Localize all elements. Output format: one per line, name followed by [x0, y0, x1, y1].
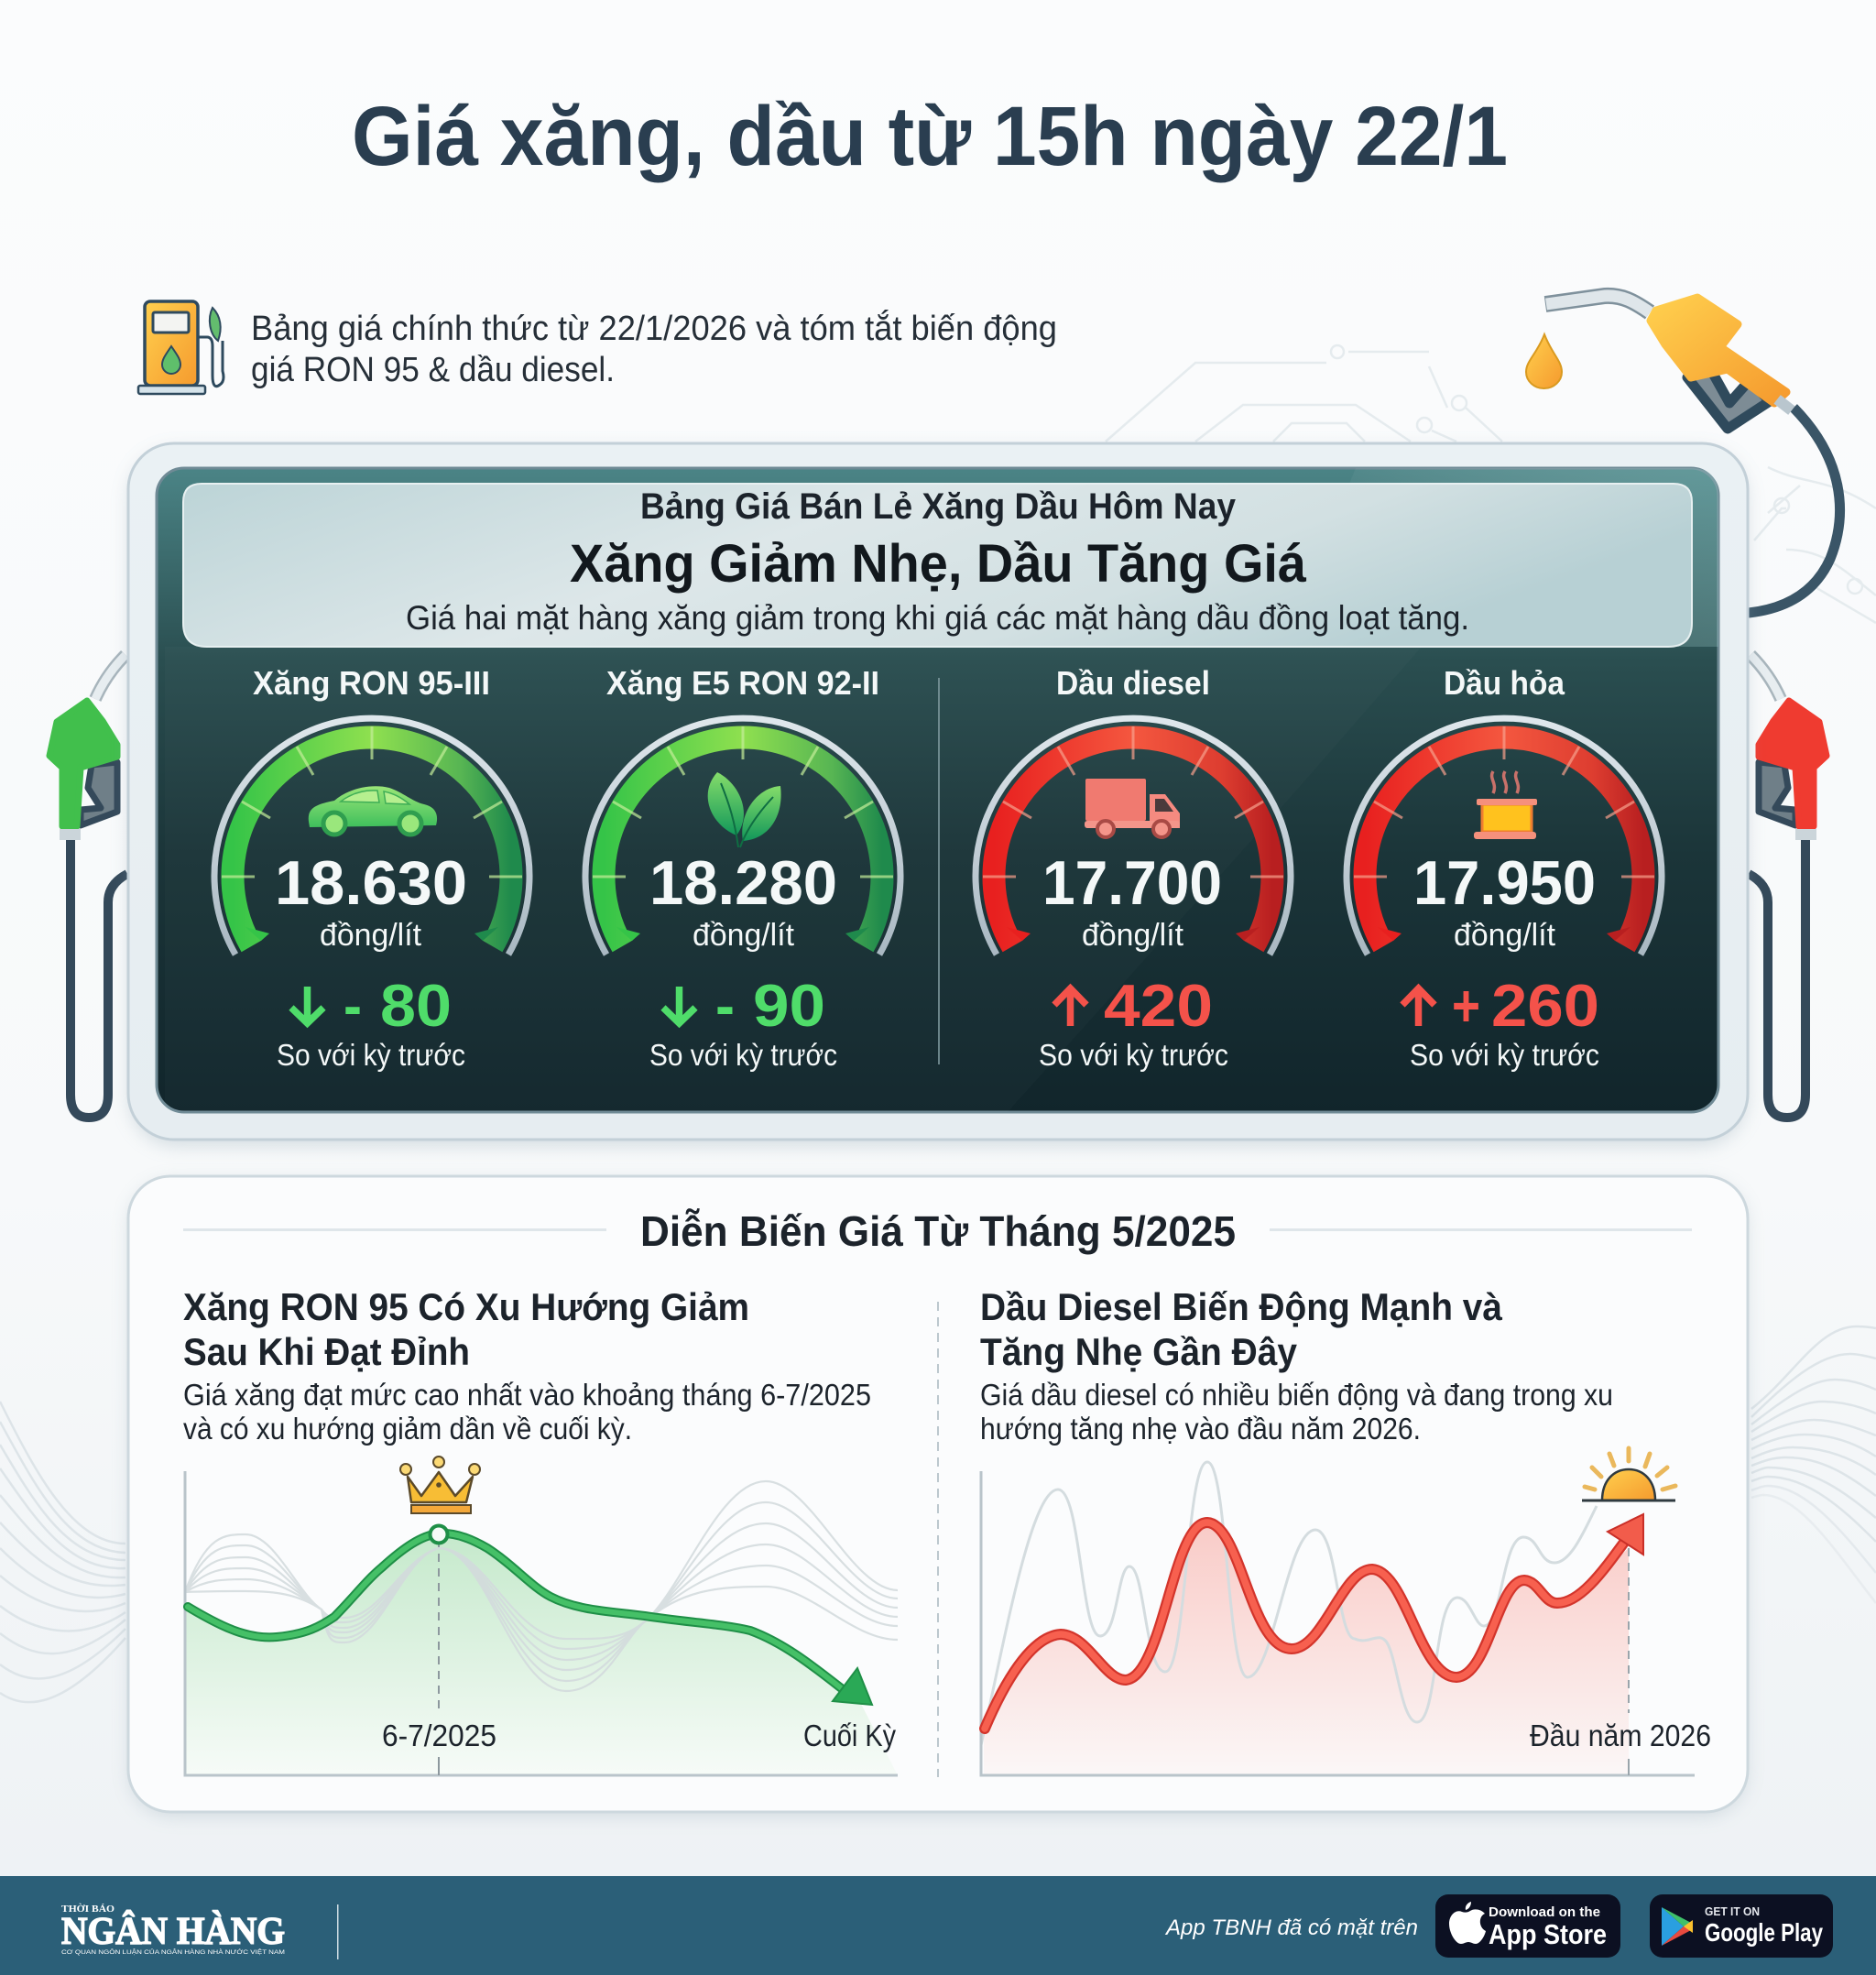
gauge: Dầu diesel: 420 [1104, 972, 1213, 1039]
text: diesel trend [980, 1285, 1613, 1446]
title: Giá xăng, dầu từ 15h ngày 22/1 [352, 90, 1508, 183]
gauge: Dầu hỏa: Dầu hỏa [1444, 664, 1565, 702]
icon: sunrise [1582, 1448, 1675, 1500]
text: diesel trend: Giá dầu diesel có nhiều biến động và đang trong xu [980, 1378, 1613, 1412]
background waves right [1751, 1326, 1876, 1603]
gauge: Dầu hỏa: 17.950 [1413, 848, 1596, 918]
button: Google Play: Google Play [1705, 1918, 1823, 1947]
icon: kerosene stove [1474, 771, 1537, 839]
gauge: Xăng RON 95-III [214, 664, 529, 1072]
gauge: Dầu hỏa: 260 [1491, 972, 1599, 1039]
icon: truck [1085, 779, 1180, 837]
icon: leaves [708, 772, 781, 847]
text: RON 95 trend: Giá xăng đạt mức cao nhất vào khoảng tháng 6-7/2025 [183, 1378, 871, 1412]
icon: green nozzle with hose [49, 655, 127, 1118]
icon: oil drop [1526, 334, 1562, 388]
intro text [251, 309, 1057, 389]
board header: Xăng Giảm Nhẹ, Dầu Tăng Giá [570, 534, 1307, 594]
text: diesel trend: hướng tăng nhẹ vào đầu năm 2026. [980, 1412, 1421, 1446]
gauge: Dầu hỏa: + [1452, 972, 1480, 1039]
icon: yellow nozzle with hose [1545, 296, 1840, 613]
gauge: Dầu hỏa: đồng/lít [1454, 918, 1556, 953]
background waves left [0, 1402, 125, 1702]
gauge: Xăng E5 RON 92-II: 18.280 [649, 848, 837, 918]
gauge: Xăng E5 RON 92-II: So với kỳ trước [649, 1038, 837, 1072]
intro text: giá RON 95 & dầu diesel. [251, 351, 615, 389]
gauge: Xăng E5 RON 92-II: 90 [753, 972, 825, 1039]
gauge: Xăng E5 RON 92-II: Xăng E5 RON 92-II [606, 664, 879, 702]
text: RON 95 trend [183, 1285, 871, 1446]
chart: RON 95 line chart: Cuối Kỳ [803, 1719, 896, 1752]
button: App Store: App Store [1489, 1918, 1607, 1950]
gauge: Xăng RON 95-III: đồng/lít [320, 918, 422, 953]
button: App Store: Download on the [1489, 1904, 1600, 1920]
board header [183, 484, 1692, 647]
button: Google Play: GET IT ON [1705, 1904, 1760, 1918]
board header: Bảng Giá Bán Lẻ Xăng Dầu Hôm Nay [640, 486, 1237, 527]
chart: diesel line chart: Đầu năm 2026 [1530, 1719, 1711, 1752]
panel: price board [128, 443, 1748, 1145]
footer bar [0, 1876, 1876, 1975]
text: diesel trend: Dầu Diesel Biến Động Mạnh và [980, 1285, 1503, 1328]
gauge: Dầu diesel [976, 664, 1291, 1072]
text: RON 95 trend: và có xu hướng giảm dần về cuối kỳ. [183, 1412, 632, 1446]
text: RON 95 trend: Sau Khi Đạt Đỉnh [183, 1330, 470, 1373]
icon: crown [400, 1457, 480, 1513]
gauge: Xăng RON 95-III: 80 [380, 972, 452, 1039]
gauge: Dầu diesel: 17.700 [1042, 848, 1222, 918]
gauge: Xăng RON 95-III: 18.630 [275, 848, 467, 918]
intro text: Bảng giá chính thức từ 22/1/2026 và tóm tắt biến động [251, 309, 1057, 348]
trends heading: Diễn Biến Giá Từ Tháng 5/2025 [640, 1207, 1236, 1255]
board header: Giá hai mặt hàng xăng giảm trong khi giá các mặt hàng dầu đồng loạt tăng. [406, 599, 1469, 637]
logo: CƠ QUAN NGÔN LUẬN CỦA NGÂN HÀNG NHÀ NƯỚC VIỆT NAM [61, 1948, 285, 1956]
chart: RON 95 line chart: 6-7/2025 [382, 1719, 496, 1752]
logo: NGÂN HÀNG [61, 1910, 285, 1953]
text: diesel trend: Tăng Nhẹ Gần Đây [980, 1330, 1298, 1373]
gauge: Xăng RON 95-III: So với kỳ trước [277, 1038, 465, 1072]
app caption: App TBNH đã có mặt trên [1164, 1915, 1418, 1940]
background circuit lines [1106, 345, 1876, 623]
gauge: Dầu diesel: Dầu diesel [1056, 664, 1210, 702]
button: Google Play [1650, 1894, 1833, 1958]
gauge: Xăng E5 RON 92-II: đồng/lít [693, 918, 795, 953]
logo: THỜI BÁO [61, 1904, 115, 1915]
gauge: Dầu diesel: đồng/lít [1082, 918, 1184, 953]
gauge: Xăng RON 95-III: - [344, 972, 362, 1039]
chart: RON 95 line chart [185, 1457, 898, 1775]
gauge: Xăng E5 RON 92-II: - [715, 972, 735, 1039]
gauge: Xăng RON 95-III: Xăng RON 95-III [253, 664, 490, 702]
text: RON 95 trend: Xăng RON 95 Có Xu Hướng Giảm [183, 1285, 749, 1328]
gauge: Dầu hỏa [1347, 664, 1662, 1072]
gauge: Dầu hỏa: So với kỳ trước [1410, 1038, 1599, 1072]
icon: car [309, 786, 437, 835]
gauge: Xăng E5 RON 92-II [585, 664, 900, 1072]
button: App Store [1435, 1894, 1620, 1958]
icon: red nozzle with hose [1749, 655, 1827, 1118]
icon: fuel pump [138, 301, 224, 394]
chart: diesel line chart [981, 1448, 1711, 1775]
panel: price trends [128, 1176, 1748, 1816]
gauge: Dầu diesel: So với kỳ trước [1039, 1038, 1228, 1072]
